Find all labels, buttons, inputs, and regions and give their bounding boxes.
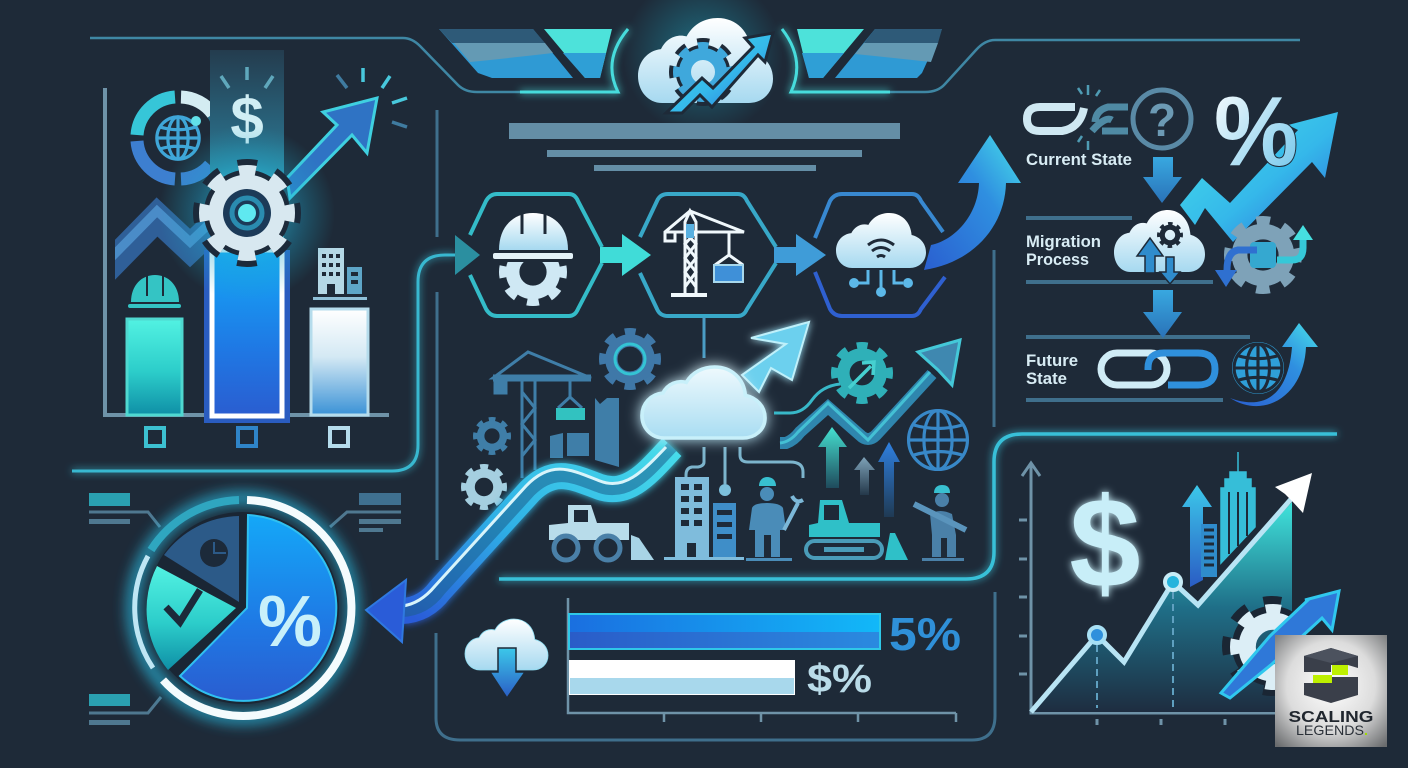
dollar symbol: $ bbox=[230, 85, 264, 152]
globe with curved arrow bbox=[1230, 323, 1318, 406]
zigzag trend bbox=[100, 209, 225, 275]
arrow 2 bbox=[774, 234, 826, 276]
up arrow with tower bbox=[1182, 452, 1255, 587]
gear blue bbox=[599, 328, 661, 390]
logo wordmark second line: LEGENDS. bbox=[1296, 722, 1368, 738]
large curved arrow up bbox=[924, 135, 1021, 270]
gear with arrow teal bbox=[831, 342, 893, 404]
wire node bbox=[719, 484, 731, 496]
broken chain icon bbox=[1027, 85, 1128, 150]
label migration process: Process bbox=[1026, 250, 1089, 269]
question mark icon bbox=[1133, 90, 1191, 148]
up arrow blue bbox=[878, 442, 900, 517]
worker with wrench bbox=[746, 477, 803, 561]
panel dividers bbox=[436, 110, 995, 740]
gear pale bbox=[461, 464, 507, 510]
hexagon 3 cloud network bbox=[815, 194, 945, 316]
label current state: Current State bbox=[1026, 150, 1132, 169]
growth line bbox=[1031, 473, 1312, 712]
area under line bbox=[1031, 502, 1292, 712]
connector from hexagon 2 bbox=[702, 317, 706, 358]
chart axes and ticks bbox=[1019, 463, 1290, 725]
gear glow bbox=[159, 125, 335, 301]
globe bbox=[909, 411, 967, 469]
building icon bbox=[313, 248, 367, 300]
connected chain icon bbox=[1101, 353, 1215, 385]
banner shape right teal bbox=[797, 29, 864, 78]
gear with loop arrows bbox=[1215, 216, 1313, 294]
dashed drop lines bbox=[1097, 592, 1173, 708]
banner shape right blue bbox=[835, 29, 942, 78]
value $%: $% bbox=[807, 657, 872, 701]
bulldozer bbox=[806, 500, 908, 560]
logo cube mark bbox=[1304, 648, 1358, 703]
flowing band to pie bbox=[402, 447, 672, 611]
growth arrow from cloud bbox=[742, 322, 809, 392]
teal bar bbox=[127, 319, 182, 415]
pie chart bbox=[133, 498, 353, 718]
crane load bbox=[556, 408, 585, 420]
upper curve line bbox=[774, 384, 840, 413]
panel: left bar chart bbox=[100, 50, 407, 446]
up arrow grey bbox=[854, 457, 875, 495]
bar 2 bbox=[569, 660, 795, 695]
label future state: Future bbox=[1026, 351, 1078, 370]
band arrowhead bbox=[366, 580, 406, 642]
axis legend squares bbox=[146, 428, 348, 446]
connector line from left chart to process flow bbox=[72, 255, 455, 471]
icon: cloud with gear and growth arrow bbox=[638, 18, 773, 113]
left buildings bbox=[550, 398, 619, 467]
header banner bbox=[90, 0, 1300, 135]
dollar symbol glowing: $ bbox=[1069, 472, 1141, 615]
data point 1 bbox=[1089, 627, 1105, 643]
dollar rays bbox=[221, 67, 273, 88]
value 5%: 5% bbox=[889, 608, 961, 660]
title placeholder bars bbox=[509, 123, 900, 171]
cloud download icon bbox=[465, 619, 548, 698]
wires from cloud bbox=[686, 447, 803, 484]
hexagon 1 helmet and gear bbox=[470, 194, 602, 316]
chart axes bbox=[105, 88, 389, 415]
arrow rays bbox=[337, 68, 407, 127]
blue slice bbox=[180, 515, 336, 701]
migration cloud icon bbox=[1114, 210, 1205, 284]
dark slice with clock bbox=[164, 516, 239, 602]
percent symbol: % bbox=[1214, 76, 1298, 186]
header accent glow bbox=[520, 29, 890, 92]
panel: pie chart and callouts bbox=[89, 493, 401, 725]
entry arrow bbox=[455, 235, 480, 275]
white bar bbox=[311, 309, 368, 415]
highlighted column beam bbox=[210, 50, 284, 255]
header logo glow bbox=[623, 0, 783, 135]
panel: process states right bbox=[1026, 76, 1338, 406]
rising zig arrow bbox=[780, 340, 960, 443]
question mark icon: ? bbox=[1148, 94, 1176, 146]
hexagon 2 crane bbox=[640, 194, 776, 316]
arrow down 2 bbox=[1143, 290, 1182, 338]
logo: scaling legends bbox=[1275, 635, 1387, 747]
logo wordmark: SCALING bbox=[1288, 709, 1374, 726]
up arrow teal bbox=[818, 427, 847, 488]
header line right bbox=[782, 29, 1300, 92]
percent label: % bbox=[258, 582, 322, 662]
banner shape left blue bbox=[439, 29, 573, 78]
central gear bbox=[194, 160, 300, 266]
building blue bbox=[664, 477, 744, 560]
helmet icon bbox=[128, 275, 181, 308]
loader bbox=[549, 505, 654, 560]
banner shape left teal bbox=[544, 29, 612, 78]
crane icon bbox=[493, 352, 591, 478]
central glowing cloud bbox=[642, 367, 765, 438]
panel: bar comparison bbox=[465, 598, 961, 722]
arrow down 1 bbox=[1143, 157, 1182, 203]
callout top left bbox=[89, 493, 160, 527]
label migration process: Migration bbox=[1026, 232, 1101, 251]
header line left bbox=[90, 29, 628, 92]
teal slice with check bbox=[147, 566, 236, 670]
gear small bbox=[473, 417, 511, 455]
panel: financial growth chart bbox=[1019, 452, 1339, 725]
panel: construction scene bbox=[366, 322, 967, 642]
bar 1 bbox=[569, 614, 880, 649]
callout bottom left bbox=[89, 694, 161, 725]
donut with globe bbox=[137, 97, 220, 179]
callout top right bbox=[330, 493, 401, 532]
bar axis bbox=[568, 598, 956, 722]
data point 2 bbox=[1165, 574, 1181, 590]
arrow 1 bbox=[600, 234, 651, 276]
gear and arrow bbox=[1221, 591, 1339, 698]
connector line under scene to right chart bbox=[499, 434, 1337, 579]
worker with wrench right bbox=[914, 485, 966, 561]
row dividers bbox=[1026, 216, 1250, 402]
blue highlighted bar bbox=[204, 250, 290, 423]
panel: process hexagons bbox=[455, 135, 1021, 358]
zigzag growth arrow bbox=[1180, 112, 1338, 242]
growth arrow bbox=[287, 98, 377, 198]
label future state: State bbox=[1026, 369, 1067, 388]
